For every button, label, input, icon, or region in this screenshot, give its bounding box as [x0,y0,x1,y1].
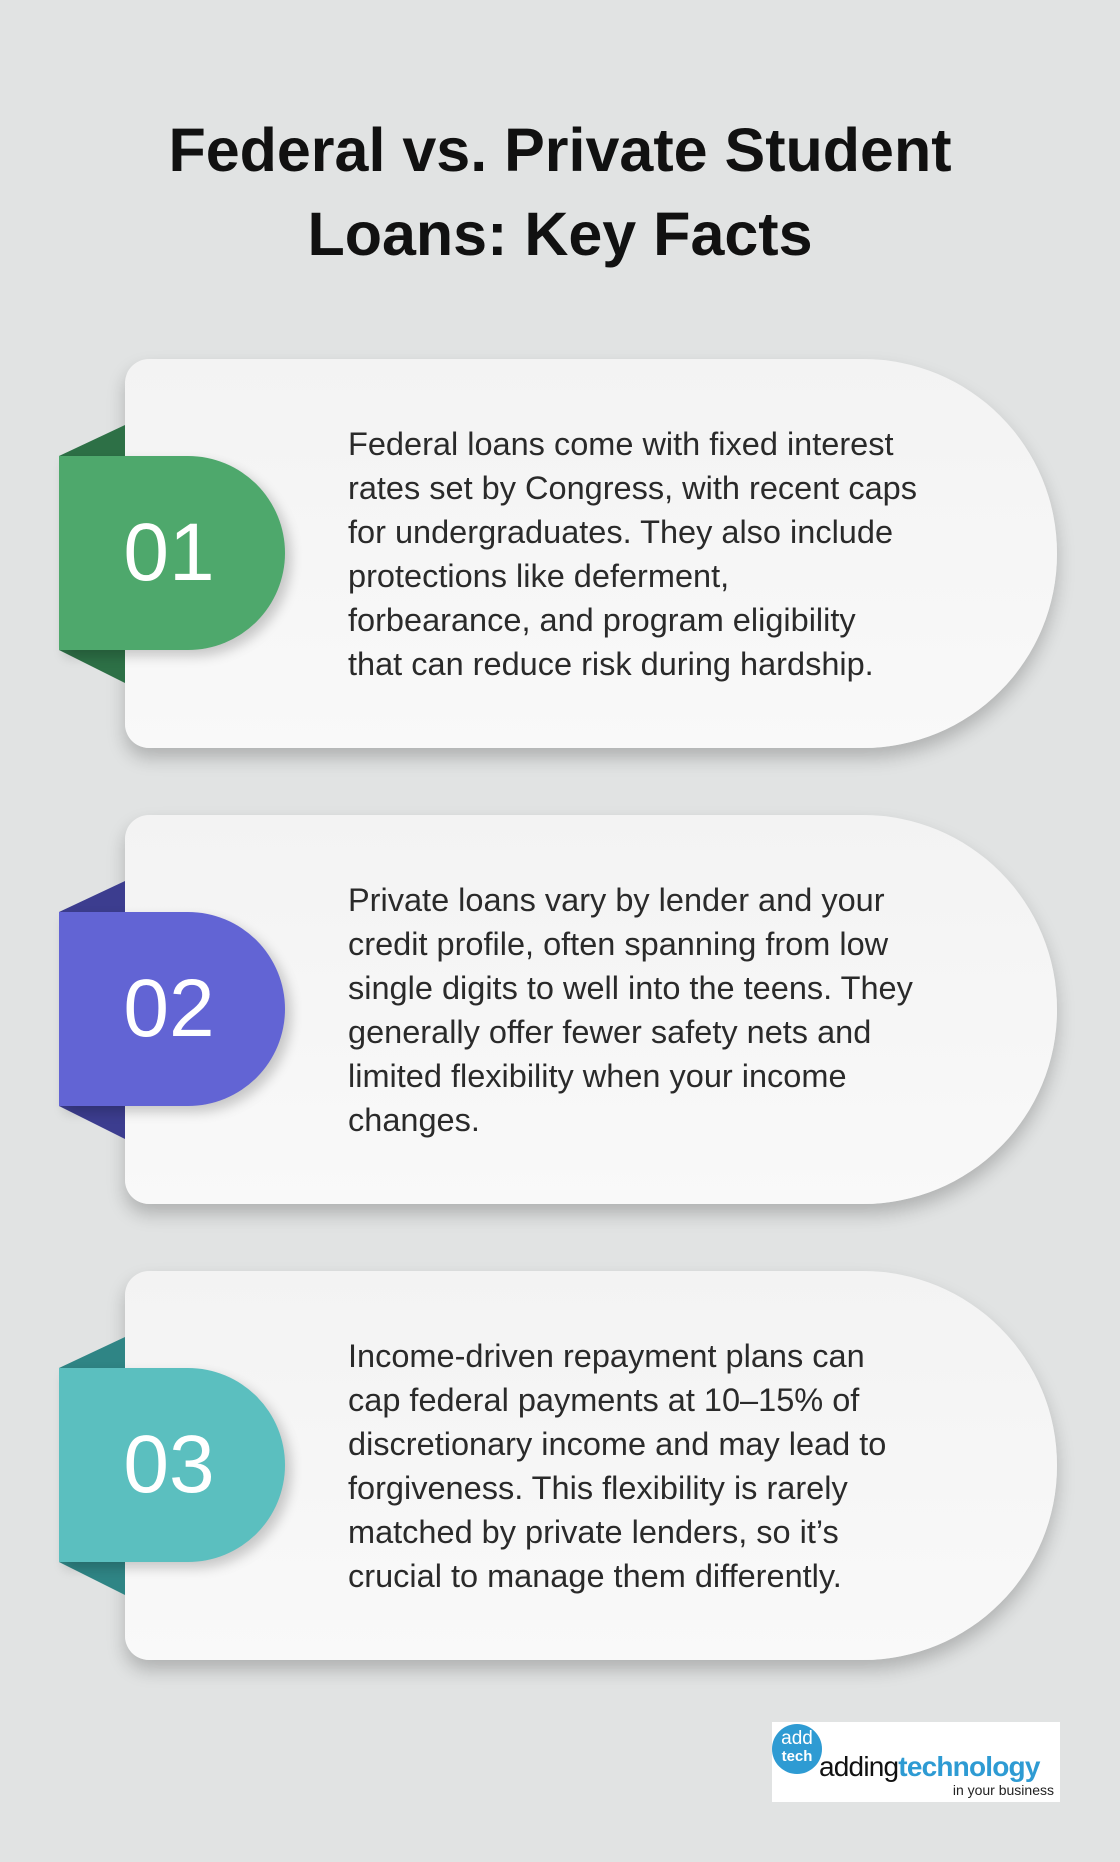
title [168,116,952,268]
logo text: addingtechnology [819,1751,1040,1782]
number tab 01 [59,456,285,650]
text block 3: matched by private lenders, so it’s [348,1514,839,1550]
text block 2: generally offer fewer safety nets and [348,1014,871,1050]
panel: card 2 [125,815,1057,1204]
text block 1: forbearance, and program eligibility [348,602,856,638]
text block 3 [348,1338,886,1594]
text block 3: crucial to manage them differently. [348,1558,842,1594]
text block 2: changes. [348,1102,480,1138]
text block 3: forgiveness. This flexibility is rarely [348,1470,848,1506]
panel: card 1 [125,359,1057,748]
text block 1 [348,426,917,682]
icon: logo circle: tech [782,1748,812,1765]
icon: logo circle [772,1724,822,1774]
logo: in your business [953,1782,1054,1798]
text block 1: that can reduce risk during hardship. [348,646,874,682]
text block 2: limited flexibility when your income [348,1058,847,1094]
text block 3: Income-driven repayment plans can [348,1338,865,1374]
text block 1: rates set by Congress, with recent caps [348,470,917,506]
fold: card 2 [59,881,125,1139]
text block 2 [348,882,913,1138]
text block 2: credit profile, often spanning from low [348,926,888,962]
number tab 02: 02 [123,963,215,1054]
text block 2: Private loans vary by lender and your [348,882,885,918]
fold: card 3 [59,1337,125,1595]
title: Loans: Key Facts [307,200,813,268]
text block 1: for undergraduates. They also include [348,514,893,550]
icon: logo circle: add [781,1728,813,1749]
number tab 01: 01 [123,507,215,598]
text block 1: Federal loans come with fixed interest [348,426,894,462]
number tab 02 [59,912,285,1106]
text block 3: cap federal payments at 10–15% of [348,1382,859,1418]
logo [772,1722,1060,1802]
title: Federal vs. Private Student [168,116,952,184]
fold: card 1 [59,425,125,683]
number tab 03: 03 [123,1419,215,1510]
number tab 03 [59,1368,285,1562]
text block 3: discretionary income and may lead to [348,1426,886,1462]
text block 2: single digits to well into the teens. They [348,970,913,1006]
panel: card 3 [125,1271,1057,1660]
text block 1: protections like deferment, [348,558,729,594]
